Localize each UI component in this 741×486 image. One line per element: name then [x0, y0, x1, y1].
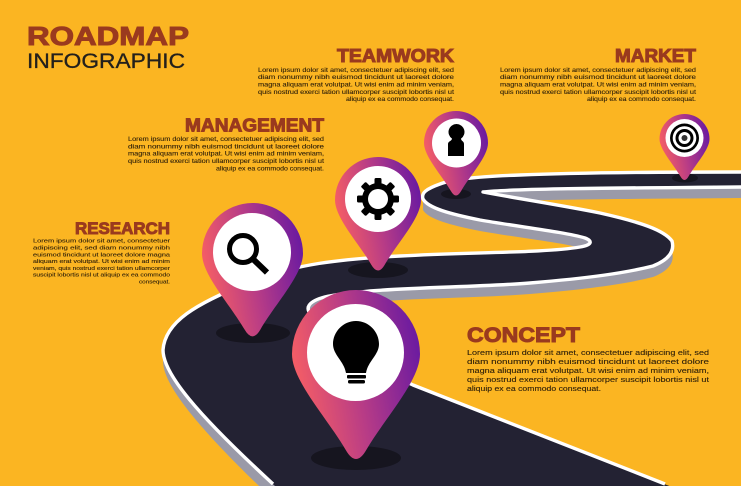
research text block: suscipit lobortis nisl ut aliquip ex ea commodo [33, 273, 170, 279]
teamwork text block [258, 46, 455, 103]
teamwork text block: TEAMWORK [337, 46, 454, 66]
concept text block: quis nostrud exerci tation ullamcorper suscipit lobortis nisl ut [467, 375, 710, 384]
icon: person [448, 124, 464, 156]
pin: management gear [335, 157, 421, 278]
research text block: adipiscing elit, sed diam nonummy nibh [33, 246, 170, 252]
research text block: veniam, quis nostrud exerci tation ullamcorper [33, 266, 170, 272]
title: INFOGRAPHIC [27, 50, 185, 73]
teamwork text block: quis nostrud exerci tation ullamcorper suscipit lobortis nisl ut [258, 90, 454, 96]
title: ROADMAP [27, 21, 189, 51]
market text block: magna aliquam erat volutpat. Ut wisi enim ad minim veniam, [500, 82, 696, 88]
icon: light bulb [333, 321, 379, 384]
management text block: MANAGEMENT [185, 116, 324, 136]
management text block: Lorem ipsum dolor sit amet, consectetuer adipiscing elit, sed [128, 137, 324, 143]
pin: research magnifier [202, 203, 303, 343]
pin: concept light bulb [292, 290, 420, 470]
concept text block [467, 324, 710, 393]
management text block: quis nostrud exerci tation ullamcorper suscipit lobortis nisl ut [128, 159, 324, 165]
icon: gear [357, 178, 399, 220]
road edge: inner line [308, 187, 741, 484]
concept text block: CONCEPT [467, 324, 580, 347]
management text block: diam nonummy nibh euismod tincidunt ut laoreet dolore [128, 144, 325, 150]
research text block: Lorem ipsum dolor sit amet, consectetuer [33, 239, 170, 245]
pin: market target [660, 114, 710, 182]
road edge: outer line [163, 172, 741, 484]
concept text block: Lorem ipsum dolor sit amet, consectetuer adipiscing elit, sed [467, 348, 709, 357]
road surface [163, 172, 741, 486]
icon: magnifier [230, 236, 267, 272]
teamwork text block: magna aliquam erat volutpat. Ut wisi enim ad minim veniam, [258, 82, 454, 88]
concept text block: diam nonummy nibh euismod tincidunt ut laoreet dolore [467, 357, 709, 366]
market text block: Lorem ipsum dolor sit amet, consectetuer adipiscing elit, sed [500, 68, 696, 74]
research text block: consequat. [139, 280, 170, 286]
management text block: aliquip ex ea commodo consequat. [216, 166, 324, 172]
market text block: quis nostrud exerci tation ullamcorper suscipit lobortis nisl ut [500, 90, 696, 96]
winding road [163, 172, 741, 486]
market text block: diam nonummy nibh euismod tincidunt ut laoreet dolore [500, 75, 697, 81]
teamwork text block: aliquip ex ea commodo consequat. [346, 97, 454, 103]
teamwork text block: Lorem ipsum dolor sit amet, consectetuer adipiscing elit, sed [258, 68, 454, 74]
icon: target [670, 124, 699, 152]
research text block: euismod tincidunt ut laoreet dolore magna [33, 252, 171, 258]
market text block [500, 46, 697, 103]
research text block [33, 219, 171, 286]
management text block: magna aliquam erat volutpat. Ut wisi enim ad minim veniam, [128, 152, 324, 158]
pin: teamwork person [424, 111, 488, 199]
teamwork text block: diam nonummy nibh euismod tincidunt ut laoreet dolore [258, 75, 455, 81]
research text block: RESEARCH [75, 219, 170, 238]
market text block: aliquip ex ea commodo consequat. [587, 97, 696, 103]
management text block [128, 116, 325, 172]
title [27, 21, 189, 73]
concept text block: aliquip ex ea commodo consequat. [467, 384, 601, 393]
road side wall [163, 180, 741, 486]
market text block: MARKET [615, 46, 696, 66]
research text block: aliquam erat volutpat. Ut wisi enim ad minim [33, 259, 170, 265]
concept text block: magna aliquam erat volutpat. Ut wisi enim ad minim veniam, [467, 366, 709, 375]
